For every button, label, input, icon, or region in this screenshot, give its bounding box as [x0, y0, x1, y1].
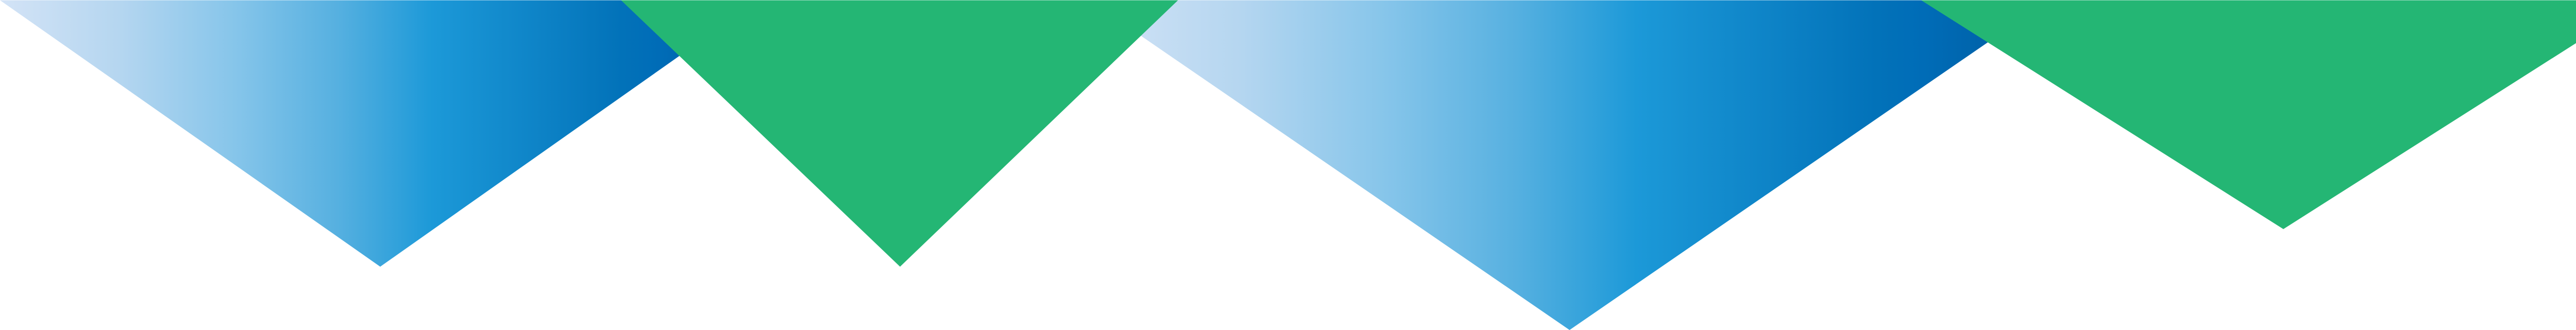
triangle: second blue gradient — [1089, 0, 2049, 330]
triangle: second green — [1921, 0, 2576, 229]
triangle: first green — [621, 0, 1178, 267]
triangle: first blue gradient — [0, 0, 758, 267]
